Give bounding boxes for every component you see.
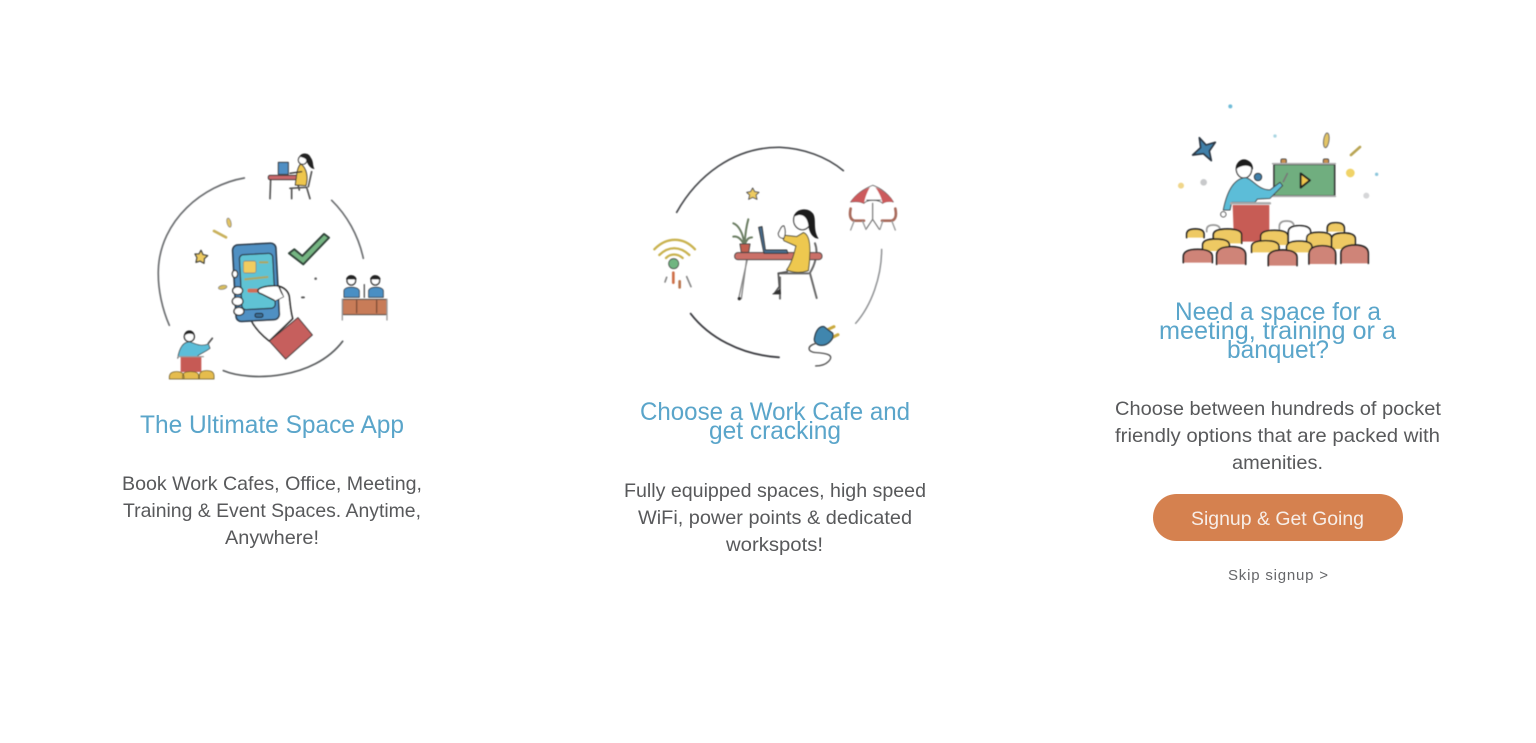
link: skip signup: Skip signup > (1228, 567, 1328, 584)
heading: Need a space for a (1175, 298, 1381, 326)
panel: the ultimate space app (122, 153, 422, 549)
icon: potted plant (733, 219, 752, 252)
panel: need a space (1115, 104, 1442, 584)
heading: Choose a Work Cafe and (640, 398, 910, 426)
icon: presenter at podium (169, 330, 214, 379)
icon: audience seats (1183, 221, 1368, 266)
ring arcs (677, 147, 882, 357)
panel: choose a work cafe (624, 147, 926, 556)
ring arcs (158, 178, 363, 377)
icon: presenter (1221, 160, 1287, 242)
icon: star and sparks (195, 218, 317, 298)
icon: screen with play button (1273, 159, 1335, 196)
icon: power plug (809, 327, 838, 366)
body text: friendly options that are packed with (1115, 425, 1440, 447)
body text: WiFi, power points & dedicated (638, 507, 912, 529)
icon: umbrella table (850, 185, 896, 230)
icon: two people at desk (342, 275, 387, 320)
body text: Book Work Cafes, Office, Meeting, (122, 473, 422, 495)
heading: meeting, training or a (1159, 317, 1396, 345)
illustration: woman working at a cafe (654, 147, 896, 366)
heading: get cracking (709, 417, 841, 445)
illustration: presenter with audience (1178, 104, 1378, 266)
body text (624, 480, 926, 556)
body text: Choose between hundreds of pocket (1115, 398, 1442, 420)
body text: workspots! (725, 534, 823, 556)
button: signup (1153, 494, 1403, 541)
icon: phone in hand (232, 243, 312, 359)
body text (122, 473, 422, 549)
illustration: phone in a ring of workspaces (158, 153, 387, 379)
body text: amenities. (1232, 452, 1323, 474)
button: signup: Signup & Get Going (1191, 508, 1364, 530)
body text: Fully equipped spaces, high speed (624, 480, 926, 502)
heading: The Ultimate Space App (140, 411, 404, 439)
icon: woman with laptop at table (735, 209, 822, 300)
body text: Training & Event Spaces. Anytime, (123, 500, 421, 522)
icon: wifi (654, 240, 695, 287)
icon: check mark (289, 234, 329, 264)
heading (640, 398, 910, 445)
heading (1159, 298, 1396, 364)
icon: woman at desk (268, 153, 315, 199)
body text: Anywhere! (225, 527, 319, 549)
body text (1115, 398, 1442, 474)
icon: confetti (1178, 104, 1378, 199)
heading: banquet? (1227, 336, 1329, 364)
icon: star (747, 188, 759, 199)
